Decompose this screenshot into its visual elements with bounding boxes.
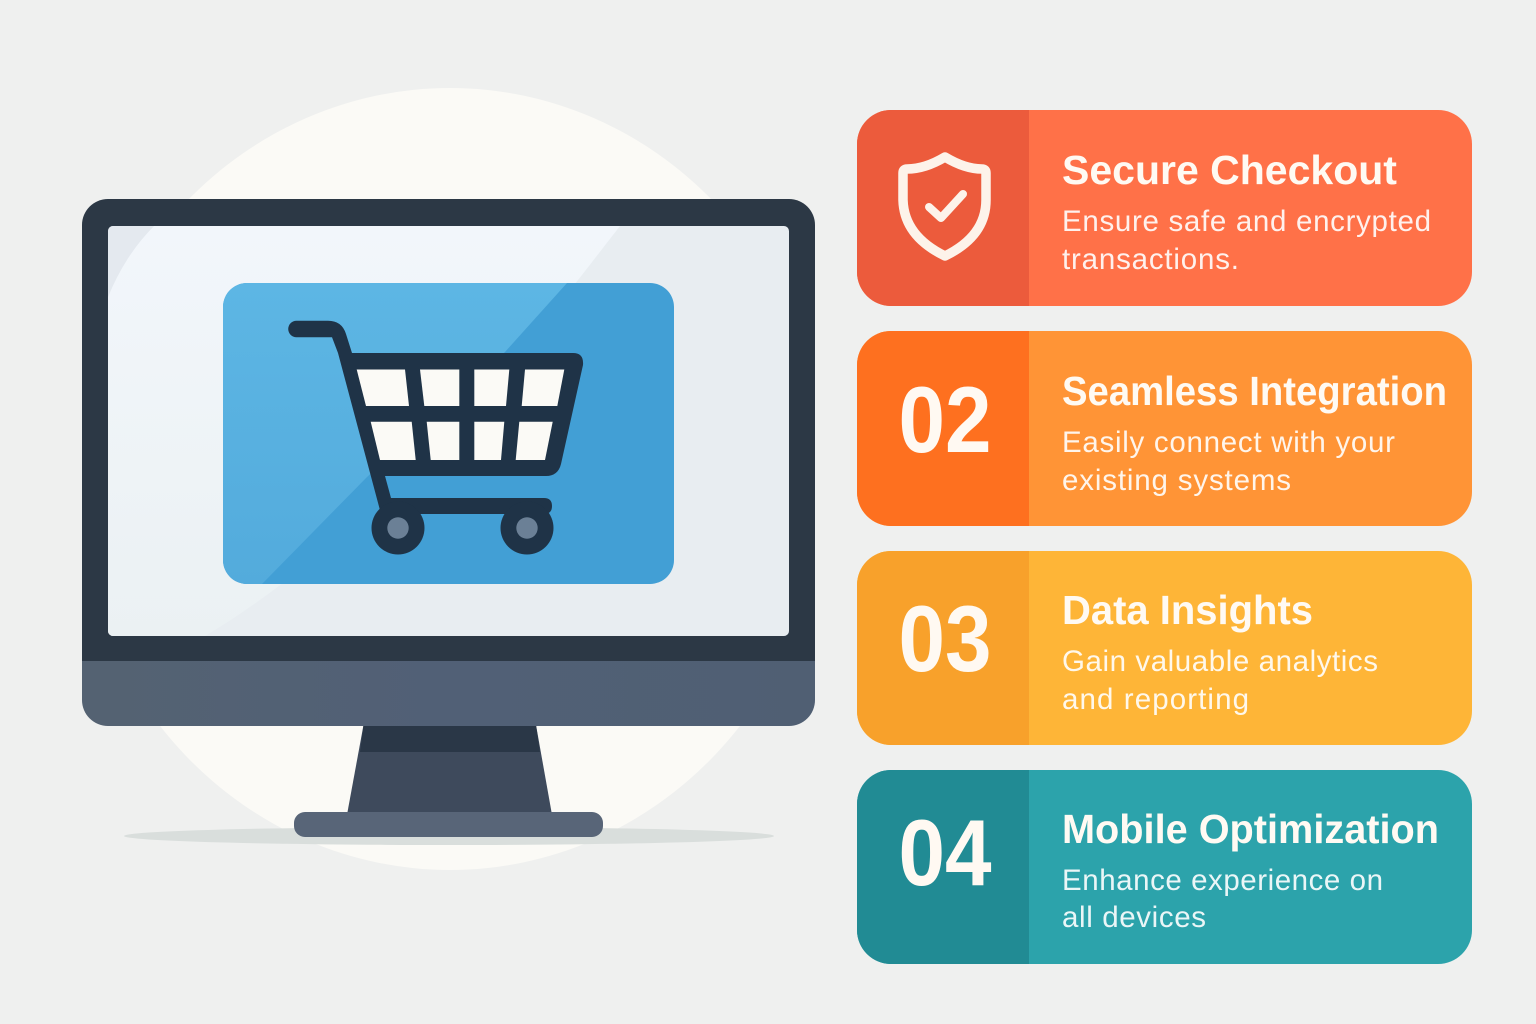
background circle bbox=[160, 88, 740, 870]
heading: Mobile Optimization bbox=[1062, 806, 1439, 852]
panel: Data Insights bbox=[857, 551, 1472, 745]
heading: Data Insights bbox=[1062, 587, 1313, 633]
monitor chin bbox=[82, 661, 815, 726]
illustration: desktop monitor bbox=[82, 199, 815, 845]
monitor frame bbox=[82, 199, 815, 662]
description: Ensure safe and encrypted bbox=[1062, 205, 1431, 238]
stand base bbox=[294, 812, 603, 837]
description: Easily connect with your bbox=[1062, 426, 1395, 459]
panel: Mobile Optimization bbox=[857, 770, 1472, 964]
shopping cart card bbox=[223, 283, 674, 584]
panel: Seamless Integration bbox=[857, 331, 1472, 526]
number: 02 bbox=[898, 367, 992, 472]
ground shadow bbox=[124, 827, 774, 845]
description: and reporting bbox=[1062, 683, 1249, 716]
heading: Seamless Integration bbox=[1062, 368, 1447, 414]
description bbox=[1062, 210, 1430, 270]
panel: Secure Checkout bbox=[857, 110, 1472, 306]
number: 03 bbox=[898, 586, 992, 691]
description: Gain valuable analytics bbox=[1062, 645, 1378, 678]
monitor stand bbox=[348, 725, 552, 812]
description bbox=[1063, 868, 1382, 928]
icon: shopping cart bbox=[288, 321, 583, 554]
heading: Secure Checkout bbox=[1062, 147, 1397, 193]
description bbox=[1062, 426, 1395, 497]
description: Enhance experience on bbox=[1062, 864, 1383, 897]
description bbox=[1062, 645, 1378, 716]
icon: shield with check bbox=[903, 157, 986, 256]
description: transactions. bbox=[1062, 243, 1239, 276]
number: 04 bbox=[898, 800, 992, 905]
description: all devices bbox=[1062, 901, 1206, 934]
description: existing systems bbox=[1062, 464, 1291, 497]
screen bbox=[108, 226, 789, 636]
